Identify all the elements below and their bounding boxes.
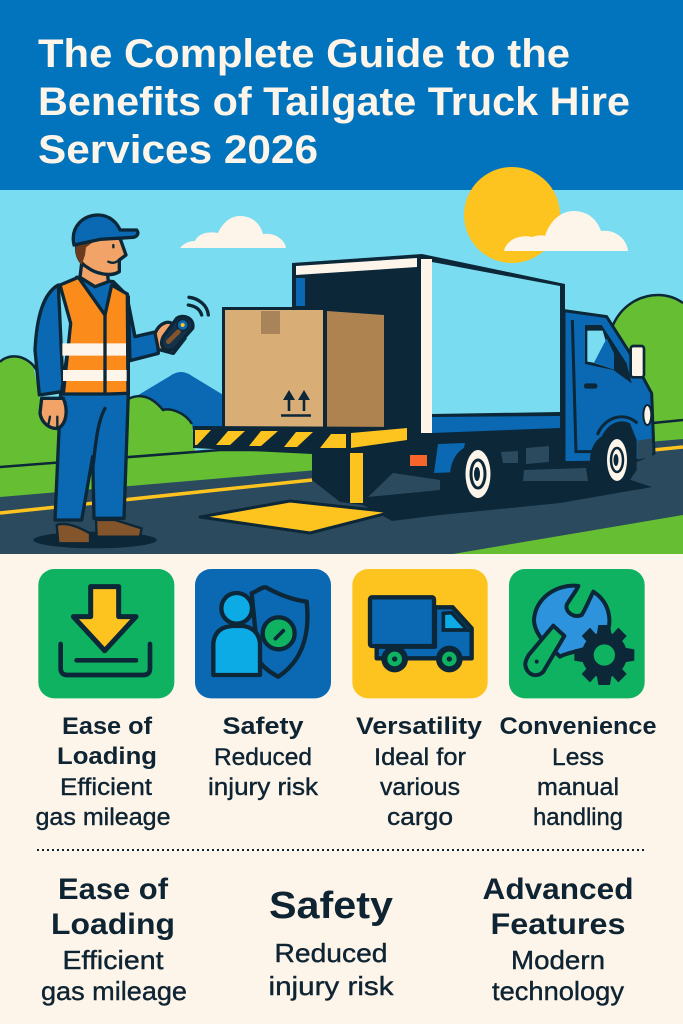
front wheel [590,434,630,486]
feature text: versatility: Versatility [356,713,483,740]
road centre line [0,447,683,513]
ground grass [0,420,683,498]
lower feature: ease of loading [41,873,187,1006]
lower feature: advanced features: Features [490,908,626,941]
illustration scene: worker and tailgate truck [0,0,683,554]
wheel arch [597,421,637,487]
feature text: ease of loading: Efficient [60,774,152,801]
cap [73,215,138,245]
icon tile: safety [195,569,331,698]
feature text: versatility [356,713,483,831]
bumper [637,438,652,459]
signal waves [188,297,208,315]
this way up arrows [281,390,311,416]
icon tile: versatility [352,569,488,698]
grass corner [453,515,683,554]
feature text: versatility: Ideal for [374,744,466,771]
feature text: convenience: manual [537,774,619,801]
platform on ground [200,501,392,533]
feature text: versatility: various [380,774,460,801]
mountain [130,372,225,430]
underbody details [434,443,465,473]
blue door panel [296,278,305,306]
rear wheel [450,446,494,506]
cardboard box [222,307,387,430]
white top rail [296,258,417,275]
lower feature: ease of loading: Efficient [62,945,164,975]
lower feature: advanced features [482,873,634,1006]
feature text: convenience: Less [552,744,604,771]
feature text: convenience: Convenience [500,713,656,740]
cloud right [504,211,628,251]
feature text: convenience: handling [533,804,623,831]
tree right [613,295,683,425]
cloud left [180,216,286,248]
far arm to remote [128,303,158,361]
feature text: ease of loading [36,713,170,831]
neck and head [80,263,108,287]
truck [193,254,654,533]
feature text: ease of loading: Loading [57,743,157,770]
cargo bay and chassis [292,254,652,521]
safety vest [60,277,128,394]
title: Benefits of Tailgate Truck Hire [38,80,630,124]
window [585,325,632,383]
shoes [57,524,90,543]
road [0,439,683,554]
lower feature: safety [268,885,395,1001]
sun [464,167,560,263]
ground shadow [33,532,157,548]
left hand [40,398,66,428]
feature text: safety [208,713,319,801]
box side panel [432,262,560,414]
feature text: safety: Safety [222,713,304,740]
lower feature: safety: Reduced [274,938,388,968]
door line [572,320,592,452]
feature text: versatility: cargo [387,804,453,831]
feature text: safety: Reduced [214,744,312,771]
blue band [432,416,560,433]
feature text: safety: injury risk [208,774,319,801]
lower feature: safety: injury risk [268,971,395,1001]
lower feature: safety: Safety [269,885,393,927]
lower feature: ease of loading: Ease of [58,873,169,906]
white door edge [421,259,432,433]
icon tile: ease of loading [38,569,174,698]
header band [0,0,683,190]
feature text: convenience [500,713,656,831]
feature text: ease of loading: gas mileage [36,804,170,831]
trousers [55,393,128,520]
lower feature: advanced features: Modern [511,945,605,975]
cab [564,311,654,487]
title [38,32,630,172]
title: The Complete Guide to the [38,32,570,76]
icon tile: convenience [509,569,645,698]
worker in safety vest with remote [33,215,208,548]
bushes left [0,356,195,470]
hand with remote control [155,322,185,353]
lower feature: advanced features: technology [492,976,624,1006]
headlight [643,405,651,425]
tailgate lift platform [193,426,408,503]
lower feature: ease of loading: Loading [51,908,175,941]
shirt and near arm [35,277,128,395]
mirror [631,346,644,377]
lower feature: ease of loading: gas mileage [41,976,187,1006]
lower feature: advanced features: Advanced [482,873,634,906]
feature text: ease of loading: Ease of [62,713,153,740]
title: Services 2026 [38,128,318,172]
gear [574,625,634,685]
